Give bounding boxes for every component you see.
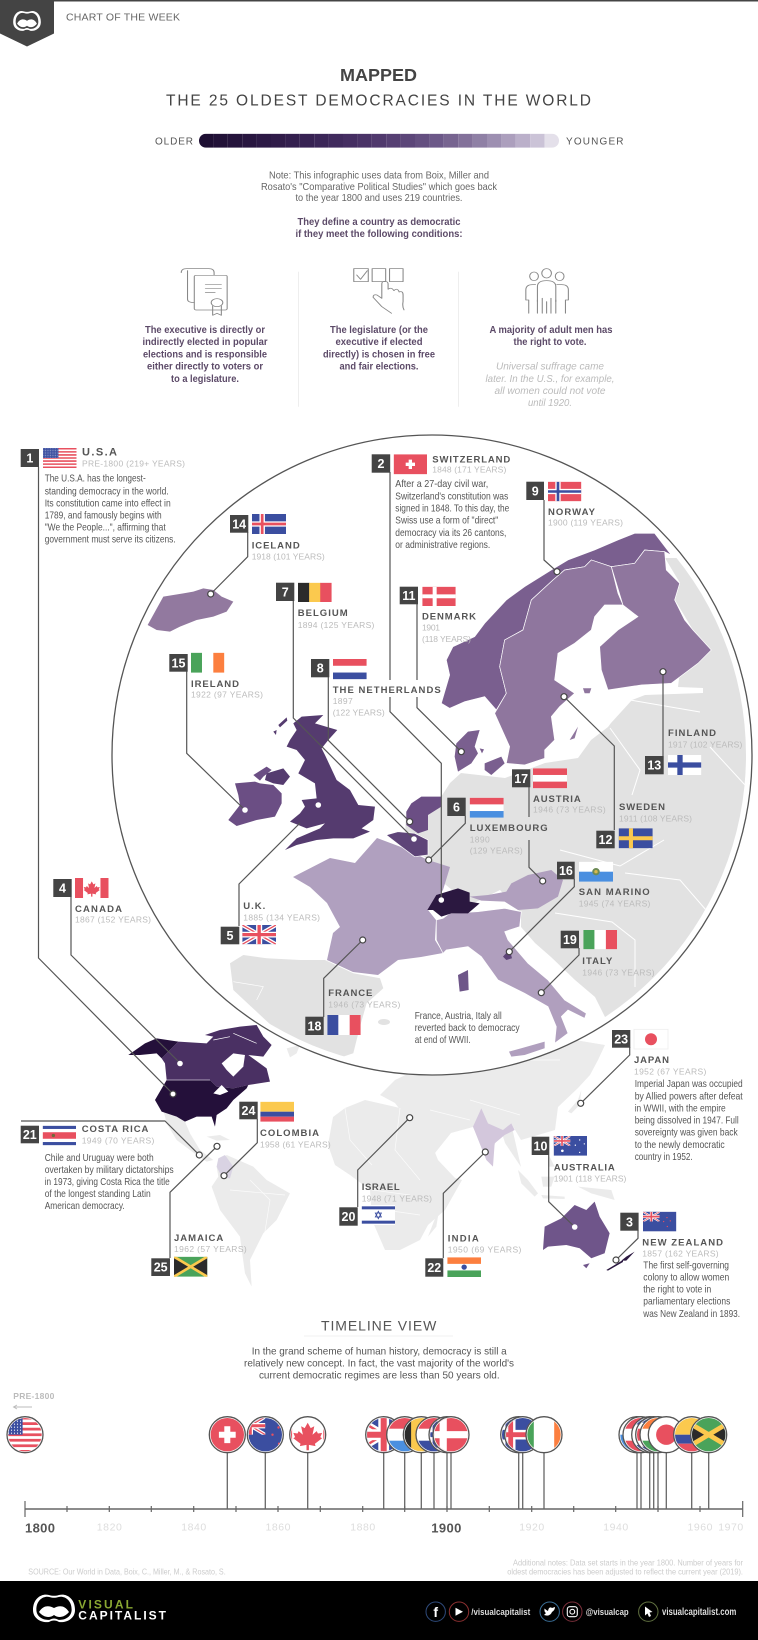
callout 25: jamaica: 25 (154, 1261, 168, 1275)
callout 23: japan: JAPAN (634, 1055, 669, 1066)
social icon: facebook: f (433, 1604, 438, 1620)
timeline flag: iceland (504, 1416, 534, 1454)
india highlighted (473, 1108, 515, 1167)
country: switzerland (427, 888, 480, 917)
timeline stems (227, 1452, 709, 1509)
axis years: 1860 (266, 1522, 291, 1534)
callout 1: usa: standing democracy in the world. (45, 486, 169, 498)
callout 12: sweden: 12 (599, 833, 612, 847)
timeline flag: canada (289, 1416, 326, 1454)
callout 2: switzerland: Switzerland's constitution was (395, 490, 508, 502)
callout 18: france: FRANCE (328, 988, 372, 999)
callout 10: australia: 10 (534, 1139, 547, 1153)
axis years: 1820 (97, 1522, 122, 1534)
axis years: 1880 (350, 1522, 375, 1534)
annotation: post-war reversion note: at end of WWII. (415, 1034, 471, 1046)
callout 6: luxembourg (447, 798, 548, 855)
timeline chart (0, 1417, 743, 1536)
footer logo: VISUAL (78, 1598, 133, 1612)
callout 14: iceland: ICELAND (252, 540, 300, 552)
axis years (25, 1520, 743, 1536)
callout 24: colombia: 24 (242, 1104, 255, 1118)
callout 25: jamaica: JAMAICA (174, 1233, 223, 1244)
timeline heading: TIMELINE VIEW (321, 1318, 437, 1334)
callout 1: usa: 1 (26, 452, 33, 466)
callout 5: uk: U.K. (243, 901, 265, 912)
colombia highlighted (217, 1155, 233, 1178)
callout 7: belgium: 7 (282, 585, 289, 599)
callout 16: san marino: SAN MARINO (579, 887, 650, 898)
callout 15: ireland: IRELAND (191, 679, 239, 690)
timeline intro text (244, 1346, 514, 1382)
callout 14: iceland: 14 (232, 517, 246, 531)
title block (166, 65, 591, 110)
leader: belgium (293, 601, 414, 839)
leader: austria (529, 787, 543, 881)
callout 2: switzerland (372, 454, 510, 551)
callout 5: uk (221, 901, 320, 944)
callout 25: jamaica (151, 1233, 247, 1277)
panel: conditions (142, 269, 614, 409)
callout 25: jamaica: 1962 (57 YEARS) (174, 1244, 247, 1254)
country: norway (441, 533, 671, 710)
social icon: youtube (449, 1602, 469, 1621)
callout 21: costa rica: overtaken by military dictatorships (45, 1164, 174, 1176)
leader: uk (239, 823, 300, 926)
callout 1: usa: "We the People...", affirming that (45, 522, 166, 534)
callout 9: norway: 9 (532, 484, 539, 498)
callout 21: costa rica: 1949 (70 YEARS) (82, 1135, 155, 1145)
callout 21: costa rica (21, 1124, 174, 1212)
leader: colombia (224, 1119, 257, 1176)
chart of the week label: CHART OF THE WEEK (66, 11, 180, 23)
callout 6: luxembourg: (129 YEARS) (470, 845, 523, 855)
inset background (112, 435, 752, 1075)
callout 1: usa: 1789, and famously begins with (45, 510, 162, 522)
callout 17: austria: 1946 (73 YEARS) (533, 804, 606, 814)
condition 3 text: all women could not vote (494, 385, 606, 397)
callout 13: finland: 13 (647, 759, 661, 773)
legend: older to younger colour scale: OLDER (155, 137, 193, 148)
callout 6: luxembourg: LUXEMBOURG (470, 823, 548, 834)
leader: france (324, 940, 363, 1017)
leader: norway (544, 500, 557, 572)
legend: older to younger colour scale (155, 134, 624, 148)
leader: japan (581, 1047, 630, 1103)
callout 7: belgium: 1894 (125 YEARS) (298, 620, 375, 630)
callout 3: new zealand: the right to vote in (643, 1284, 711, 1296)
north america: usa (128, 1038, 248, 1127)
callout 1: usa: Its constitution came into effect in (45, 498, 171, 510)
leader: india (443, 1152, 485, 1258)
axis years: 1960 (688, 1522, 713, 1534)
callout 12: sweden (596, 802, 692, 848)
country: sweden (495, 560, 623, 765)
callout 18: france: 1946 (73 YEARS) (328, 999, 400, 1009)
callout 24: colombia: 1958 (61 YEARS) (260, 1139, 331, 1149)
callout 20: israel (339, 1182, 432, 1226)
axis years: 1920 (519, 1522, 544, 1534)
callout 3: new zealand (620, 1212, 740, 1320)
callout 14: iceland: 1918 (101 YEARS) (252, 552, 325, 562)
source line: SOURCE: Our World in Data, Boix, C., Miller, M., & Rosato, S. (28, 1566, 226, 1576)
subtitle: THE 25 OLDEST DEMOCRACIES IN THE WORLD (166, 92, 591, 110)
callout 12: sweden: 1911 (108 YEARS) (619, 813, 692, 823)
country: iceland (148, 588, 233, 632)
callout 17: austria: 17 (514, 772, 528, 786)
callout 18: france: 18 (308, 1019, 321, 1033)
callout 5: uk: 5 (227, 929, 234, 943)
timeline flag: ireland (525, 1416, 563, 1454)
condition 2 text: and fair elections. (340, 360, 419, 372)
country: netherlands (406, 797, 441, 833)
callout 11: denmark: 11 (402, 589, 415, 603)
callout 4: canada: CANADA (75, 904, 122, 915)
callout 21: costa rica: in 1973, giving Costa Rica the title (45, 1176, 170, 1188)
timeline flag: jamaica (690, 1416, 728, 1454)
callout 3: new zealand: 3 (626, 1215, 633, 1229)
callout 2: switzerland: or administrative regions. (395, 539, 490, 551)
axis years: 1940 (603, 1522, 628, 1534)
callout 17: austria: AUSTRIA (533, 794, 581, 805)
handle: visualcap: @visualcap (586, 1607, 629, 1618)
leader: switzerland (390, 472, 441, 900)
callout 1: usa: government must serve its citizens. (45, 534, 176, 546)
condition 3 text (486, 324, 614, 409)
callout 7: belgium (276, 583, 375, 630)
callout 5: uk: 1885 (134 YEARS) (243, 912, 320, 922)
additional notes (507, 1558, 743, 1576)
annotation: post-war reversion note: France, Austria, Italy all (415, 1010, 502, 1022)
callout 23: japan: to the newly democratic (635, 1139, 725, 1151)
condition 2 text: executive if elected (336, 336, 422, 348)
callout 7: belgium: BELGIUM (298, 608, 348, 619)
callout 8: netherlands: (122 YEARS) (333, 707, 385, 717)
timeline intro text: relatively new concept. In fact, the vast majority of the world's (244, 1358, 514, 1370)
callout 9: norway (526, 482, 623, 527)
timeline axis (25, 1501, 743, 1517)
note text: Note: This infographic uses data from Boix, Miller and (269, 170, 489, 182)
callout 13: finland (645, 728, 742, 775)
note text (261, 170, 498, 204)
callout 21: costa rica: of the longest standing Latin (45, 1188, 151, 1200)
conditions intro (296, 216, 462, 240)
panel: europe circle inset (112, 435, 758, 1075)
callout 15: ireland (169, 653, 263, 699)
map markers (170, 569, 666, 1263)
timeline flag: austria (622, 1416, 646, 1454)
timeline flag: norway (428, 1416, 450, 1454)
condition 3 text: later. In the U.S., for example, (486, 373, 614, 385)
note text: to the year 1800 and uses 219 countries. (296, 192, 462, 204)
country: denmark (455, 730, 505, 775)
callout 18: france (305, 988, 400, 1035)
callout 1: usa (21, 446, 185, 546)
callout 11: denmark: (118 YEARS) (422, 634, 471, 644)
callout 4: canada (53, 878, 151, 924)
callout 13: finland: 1917 (102 YEARS) (668, 739, 742, 749)
callout 23: japan: 1952 (67 YEARS) (634, 1066, 706, 1076)
callout 16: san marino: 1945 (74 YEARS) (579, 898, 651, 908)
leader: iceland (211, 532, 248, 594)
callout 23: japan: in WWII, with the empire (635, 1102, 726, 1114)
timeline flag: costa rica (635, 1416, 657, 1454)
callout 2: switzerland: 2 (378, 457, 385, 471)
timeline flag: japan (648, 1416, 679, 1454)
callout 22: india: INDIA (448, 1234, 479, 1244)
annotation: post-war reversion note (415, 1010, 520, 1046)
footer logo: CAPITALIST (78, 1608, 167, 1622)
condition 3 text: A majority of adult men has (490, 324, 613, 336)
callout 16: san marino (557, 862, 651, 908)
callout 10: australia: AUSTRALIA (554, 1162, 615, 1174)
timeline flag: uk (365, 1416, 394, 1454)
condition 3 text: the right to vote. (514, 336, 587, 348)
callout 2: switzerland: democracy via its 26 cantons, (395, 527, 506, 539)
conditions intro: if they meet the following conditions: (296, 228, 462, 240)
callout 9: norway: 1900 (119 YEARS) (548, 517, 623, 527)
circle outline (112, 435, 752, 1075)
social icon: instagram (563, 1602, 582, 1621)
timeline flag: israel (631, 1416, 653, 1454)
callout 11: denmark: DENMARK (422, 612, 476, 622)
website icon (639, 1602, 658, 1621)
icon: three people (526, 269, 568, 313)
callout 14: iceland (230, 514, 325, 562)
axis years: 1970 (718, 1522, 743, 1534)
callout 20: israel: ISRAEL (362, 1182, 400, 1193)
axis years: 1840 (181, 1522, 206, 1534)
callout 2: switzerland: Swiss use a form of "direct" (395, 514, 499, 526)
timeline flag: usa (6, 1416, 44, 1454)
leader: netherlands (328, 677, 410, 822)
leader: usa (38, 467, 173, 1094)
new zealand (606, 1252, 635, 1271)
callout 3: new zealand: colony to allow women (643, 1272, 729, 1284)
inset grey land (230, 558, 758, 1060)
callout 9: norway: NORWAY (548, 507, 596, 518)
callout 15: ireland: 15 (172, 656, 185, 670)
country: ireland (228, 767, 282, 826)
callout 3: new zealand: NEW ZEALAND (642, 1238, 723, 1248)
timeline flag: netherlands (415, 1416, 441, 1454)
leader: san marino (509, 879, 574, 952)
callout 8: netherlands: 1897 (333, 696, 353, 706)
condition 1 text: either directly to voters or (147, 360, 263, 372)
footer (0, 1581, 758, 1640)
callout 2: switzerland: 1848 (171 YEARS) (432, 465, 506, 475)
condition 3 text: until 1920. (528, 397, 572, 409)
country: san marino (503, 949, 512, 960)
callout 11: denmark (400, 587, 476, 644)
condition 2 text: The legislature (or the (330, 324, 428, 336)
callout 22: india: 22 (427, 1261, 441, 1275)
country: finland (600, 550, 711, 690)
australia (543, 1202, 610, 1268)
callout 6: luxembourg: 1890 (470, 834, 490, 844)
callout 10: australia: 1901 (118 YEARS) (554, 1174, 627, 1184)
callout 4: canada: 4 (59, 882, 66, 896)
condition 3 text: Universal suffrage came (496, 360, 604, 372)
callout 1: usa: U.S.A (82, 446, 117, 458)
timeline flag: switzerland (208, 1416, 246, 1454)
callout 3: new zealand: 1857 (162 YEARS) (642, 1249, 719, 1259)
north america: canada (162, 1025, 272, 1088)
callout 21: costa rica: COSTA RICA (82, 1124, 149, 1135)
timeline flag: finland (500, 1416, 522, 1454)
callout 2: switzerland: After a 27-day civil war, (395, 478, 488, 490)
leader: canada (71, 897, 180, 1063)
callout 10: australia (532, 1136, 627, 1184)
condition 1 text: elections and is responsible (143, 348, 267, 360)
country borders in world land (230, 1060, 560, 1250)
country: belgium (386, 832, 428, 857)
callout 12: sweden: SWEDEN (619, 802, 665, 813)
callout 1: usa: PRE-1800 (219+ YEARS) (82, 458, 185, 468)
leader: denmark (417, 604, 461, 752)
social icon: twitter (540, 1602, 559, 1621)
country: corsica (458, 970, 469, 992)
callout 21: costa rica: Chile and Uruguay were both (45, 1152, 154, 1164)
timeline intro text: current democratic regimes are less than 50 years old. (259, 1370, 500, 1382)
leader: sweden (564, 697, 614, 830)
timeline flag: india (639, 1416, 662, 1454)
leader: finland (662, 672, 664, 756)
callout 17: austria (512, 768, 606, 814)
callout 24: colombia: COLOMBIA (260, 1128, 319, 1139)
callout 8: netherlands (311, 659, 441, 717)
handle: visualcapitalist: /visualcapitalist (471, 1607, 531, 1618)
note text: Rosato's "Comparative Political Studies" which goes back (261, 181, 498, 193)
title: mapped: MAPPED (340, 65, 417, 85)
condition 1 text: indirectly elected in popular (142, 336, 268, 348)
timeline flag: denmark (432, 1416, 470, 1454)
callout 3: new zealand: parliamentary elections (643, 1296, 730, 1308)
callout 2: switzerland: signed in 1848. To this day, the (395, 502, 509, 514)
timeline flag: belgium (402, 1416, 428, 1454)
condition 1 text (142, 324, 268, 385)
callout 23: japan: 23 (614, 1032, 628, 1046)
callout 20: israel: 20 (342, 1210, 355, 1224)
icon: ballot checkboxes and hand (354, 269, 404, 313)
country: austria (470, 870, 563, 910)
website url: visualcapitalist.com (662, 1607, 736, 1618)
condition 1 text: to a legislature. (171, 373, 239, 385)
logo tab (0, 0, 54, 46)
leader: ireland (187, 671, 245, 810)
callout 19: italy: 19 (563, 933, 577, 947)
leader: costa rica (21, 1121, 199, 1155)
callout 2: switzerland: SWITZERLAND (432, 454, 510, 466)
leader: australia (549, 1155, 575, 1227)
legend: older to younger colour scale: YOUNGER (566, 137, 624, 148)
callout 23: japan (612, 1029, 743, 1163)
callout 4: canada: 1867 (152 YEARS) (75, 914, 151, 924)
callout 15: ireland: 1922 (97 YEARS) (191, 689, 263, 699)
world map (128, 1025, 635, 1287)
callout 21: costa rica: 21 (23, 1128, 37, 1142)
condition 1 text: The executive is directly or (145, 324, 265, 336)
callout 13: finland: FINLAND (668, 728, 716, 739)
callout 23: japan: country in 1952. (635, 1151, 693, 1163)
callout 16: san marino: 16 (559, 864, 573, 878)
callout 19: italy (561, 930, 655, 977)
callout 8: netherlands: 8 (317, 662, 324, 676)
timeline flag: san marino (618, 1416, 640, 1454)
leader lines (21, 467, 663, 1260)
callout 1: usa: The U.S.A. has the longest- (45, 472, 146, 484)
leader: israel (358, 1118, 410, 1207)
timeline flag: new zealand (246, 1416, 284, 1454)
callout 22: india (425, 1234, 522, 1277)
condition 2 text (323, 324, 435, 372)
country: uk (265, 715, 375, 850)
leader: new zealand (616, 1230, 638, 1260)
timeline intro text: In the grand scheme of human history, democracy is still a (252, 1346, 507, 1358)
timeline: pre-1800 marker (13, 1391, 55, 1409)
icon: constitution document (181, 269, 227, 315)
callout 22: india: 1950 (69 YEARS) (448, 1245, 522, 1255)
social icon: facebook (426, 1602, 445, 1621)
axis years: 1900 (431, 1520, 461, 1536)
footer logo (33, 1595, 167, 1622)
world land: grey continents (163, 1040, 615, 1287)
leader: italy (541, 948, 579, 993)
country: france (293, 838, 450, 975)
annotation: post-war reversion note: reverted back to democracy (415, 1022, 520, 1034)
axis years: 1800 (25, 1520, 55, 1536)
dividers (298, 272, 458, 407)
callout 21: costa rica: American democracy. (45, 1200, 125, 1212)
callout 19: italy: ITALY (582, 956, 613, 967)
condition 2 text: directly) is chosen in free (323, 348, 435, 360)
callout 3: new zealand: The first self-governing (643, 1260, 729, 1272)
callout 6: luxembourg: 6 (453, 800, 460, 814)
header bar (0, 0, 758, 46)
timeline: pre-1800 marker: PRE-1800 (13, 1391, 55, 1401)
callout 20: israel: 1948 (71 YEARS) (362, 1193, 432, 1203)
leader: jamaica (170, 1146, 217, 1258)
callout 11: denmark: 1901 (422, 623, 440, 633)
timeline flag: colombia (673, 1416, 700, 1454)
callout 8: netherlands: THE NETHERLANDS (333, 685, 441, 696)
leader: luxembourg (429, 816, 465, 860)
callout 24: colombia (239, 1102, 331, 1149)
conditions intro: They define a country as democratic (298, 216, 461, 228)
callout 19: italy: 1946 (73 YEARS) (582, 967, 655, 977)
timeline flag: luxembourg (386, 1416, 413, 1454)
country: italy (436, 908, 586, 1057)
